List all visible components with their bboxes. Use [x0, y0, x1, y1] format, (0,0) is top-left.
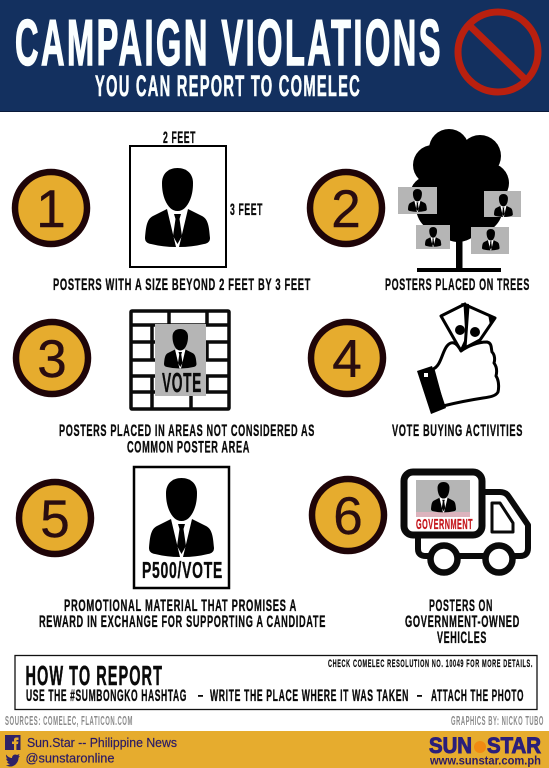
icon: brick wall with vote poster: VOTE [162, 367, 202, 398]
number badge 5: 5 [40, 490, 70, 549]
caption 3 [59, 421, 315, 456]
caption 6 [405, 596, 520, 647]
poster icon with dimensions: 3 FEET [230, 200, 263, 219]
panel: violation 2 [310, 129, 530, 294]
caption 6: VEHICLES [437, 628, 487, 647]
icon: truck with government poster [404, 472, 528, 572]
caption 1: POSTERS WITH A SIZE BEYOND 2 FEET BY 3 FEET [53, 275, 311, 294]
number badge 4: 4 [332, 330, 362, 389]
how to report heading: HOW TO REPORT [26, 660, 163, 691]
icon: hand holding money [417, 303, 499, 414]
Sun.Star logo [429, 733, 541, 768]
icon: twitter bird [6, 754, 20, 767]
header banner [0, 0, 549, 112]
number badge 3: 3 [37, 330, 67, 389]
panel: violation 4 [311, 303, 523, 440]
number badge 1 [15, 172, 87, 244]
icon: tree with posters [398, 129, 521, 272]
number badge 5 [19, 482, 91, 554]
number badge 3 [16, 322, 88, 394]
reporting steps [26, 687, 524, 705]
icon: truck with government poster: GOVERNMENT [416, 517, 473, 533]
Sun.Star logo: www.sunstar.com.ph [429, 756, 541, 768]
caption 6: POSTERS ON [429, 596, 493, 615]
panel: violation 6 [312, 472, 528, 647]
icon: facebook [5, 735, 20, 750]
caption 5 [39, 596, 326, 631]
icon: brick wall with vote poster [131, 311, 229, 409]
reporting steps: USE THE #SUMBONGKO HASHTAG [26, 687, 187, 705]
twitter handle: @sunstaronline [26, 750, 114, 766]
number badge 2: 2 [331, 180, 361, 239]
number badge 4 [311, 322, 383, 394]
poster icon with dimensions: 2 FEET [163, 128, 196, 147]
poster icon with reward text [134, 467, 229, 588]
number badge 2 [310, 172, 382, 244]
Sun.Star logo: SUN [429, 733, 472, 758]
caption 5: PROMOTIONAL MATERIAL THAT PROMISES A [64, 596, 297, 615]
panel: violation 1 [15, 128, 311, 294]
infographic: SOURCES: COMELEC, FLATICON.COM [5, 714, 133, 728]
panel: violation 3 [16, 311, 315, 456]
poster icon with dimensions [130, 128, 263, 267]
panel: violation 5 [19, 467, 326, 631]
Sun.Star logo: STAR [487, 733, 541, 758]
number badge 1: 1 [36, 180, 66, 239]
poster icon with reward text: P500/VOTE [142, 557, 223, 583]
footer bar [0, 731, 549, 768]
caption 3: COMMON POSTER AREA [127, 438, 250, 456]
number badge 6 [312, 479, 384, 551]
icon: prohibition sign [458, 12, 538, 92]
number badge 6: 6 [333, 487, 363, 546]
caption 3: POSTERS PLACED IN AREAS NOT CONSIDERED AS [59, 421, 315, 440]
panel: how to report [15, 656, 537, 710]
facebook handle: Sun.Star -- Philippine News [27, 735, 177, 750]
